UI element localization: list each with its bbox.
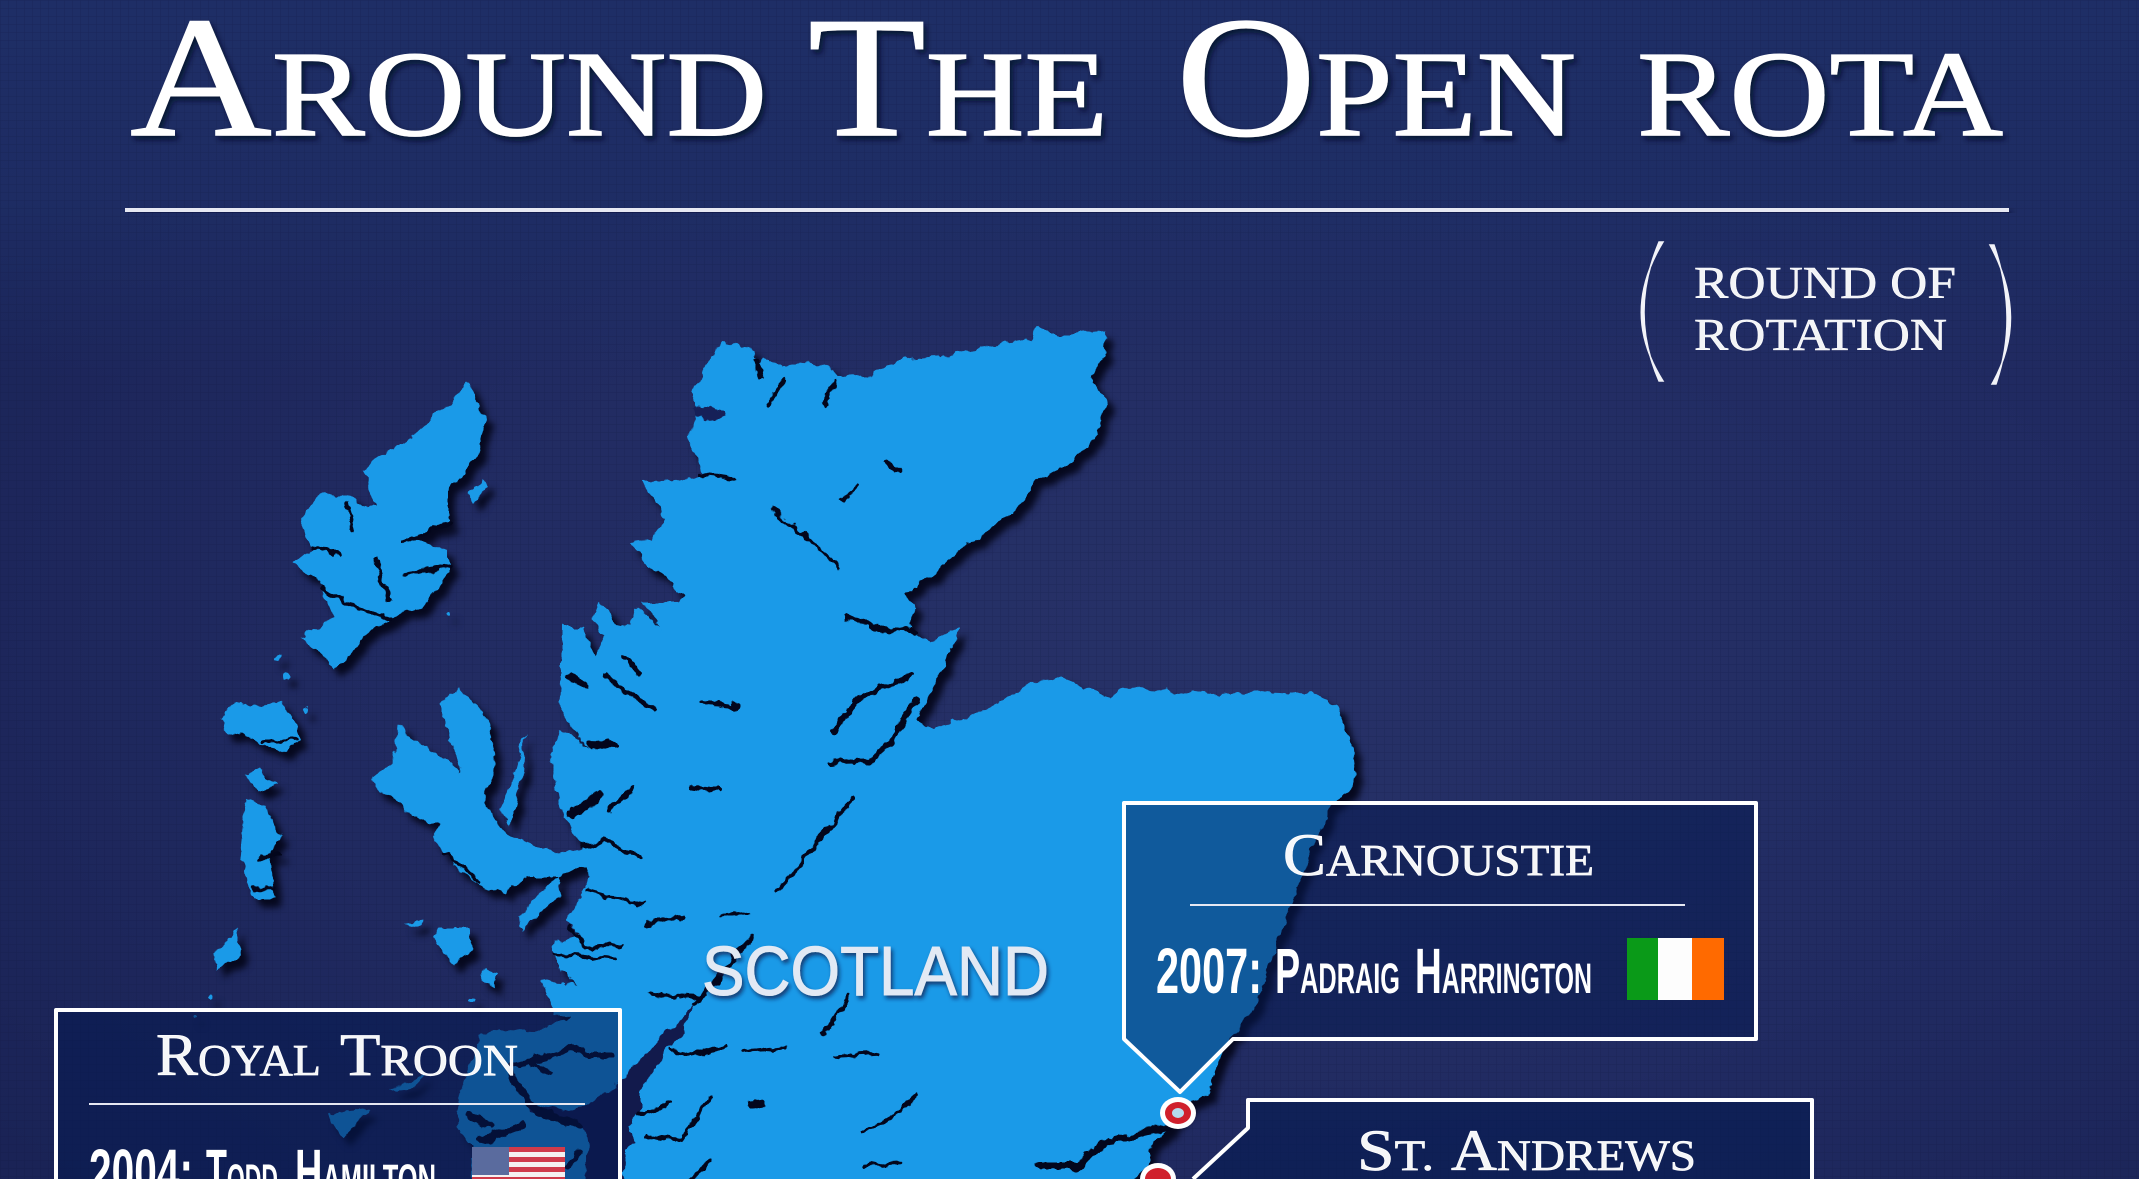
sea lochs — [255, 362, 1168, 1179]
Lismore — [390, 1073, 425, 1090]
Lewis and Harris — [293, 383, 485, 670]
winner line: PADRAIG — [1275, 935, 1400, 1007]
callout divider — [89, 1103, 585, 1105]
right parenthesis — [1990, 245, 2011, 384]
Benbecula — [245, 767, 275, 793]
callout: Carnoustie — [1124, 803, 1756, 1092]
map of Scotland — [194, 325, 1355, 1179]
location marker: St. Andrews — [1140, 1163, 1176, 1179]
note text: ROTATION — [1694, 310, 1947, 360]
flag: United States — [472, 1147, 565, 1179]
title: ROTA — [1637, 27, 2003, 162]
callout title: CARNOUSTIE — [1283, 822, 1594, 888]
winner line: 2007: — [1156, 935, 1262, 1007]
Skye — [370, 687, 589, 894]
Sleat — [518, 876, 561, 931]
callout title: ROYAL — [156, 1022, 321, 1088]
Scalpay — [468, 478, 490, 504]
islands — [194, 383, 589, 1137]
small isles — [194, 611, 475, 1019]
Canna — [403, 919, 423, 928]
title — [130, 0, 2003, 173]
left parenthesis — [1641, 242, 1663, 381]
flag: Ireland — [1627, 938, 1724, 1000]
Barra — [214, 931, 240, 971]
title rule — [125, 208, 2009, 212]
winner line — [89, 1136, 436, 1179]
note text — [1694, 258, 1956, 360]
Rum — [433, 928, 472, 965]
callout divider — [1190, 904, 1685, 906]
callout: St. Andrews — [1193, 1100, 1812, 1179]
Eigg — [482, 968, 497, 988]
Raasay — [500, 733, 525, 825]
location marker: Carnoustie — [1160, 1097, 1196, 1129]
callout title — [156, 1022, 518, 1088]
mainland — [457, 325, 1355, 1179]
note: round of rotation — [1641, 242, 2011, 384]
North Uist — [219, 699, 301, 753]
callout title: TROON — [340, 1022, 518, 1088]
Mull — [328, 1108, 373, 1137]
map label: Scotland: SCOTLAND — [702, 932, 1049, 1010]
sea channel — [528, 1003, 697, 1179]
callout title — [1357, 1118, 1696, 1179]
South Uist — [240, 799, 280, 899]
winner line: HARRINGTON — [1415, 935, 1592, 1007]
winner line — [1156, 935, 1592, 1007]
note text: ROUND OF — [1694, 258, 1956, 308]
callout: Royal Troon — [56, 1010, 620, 1179]
island lochs — [403, 524, 449, 541]
